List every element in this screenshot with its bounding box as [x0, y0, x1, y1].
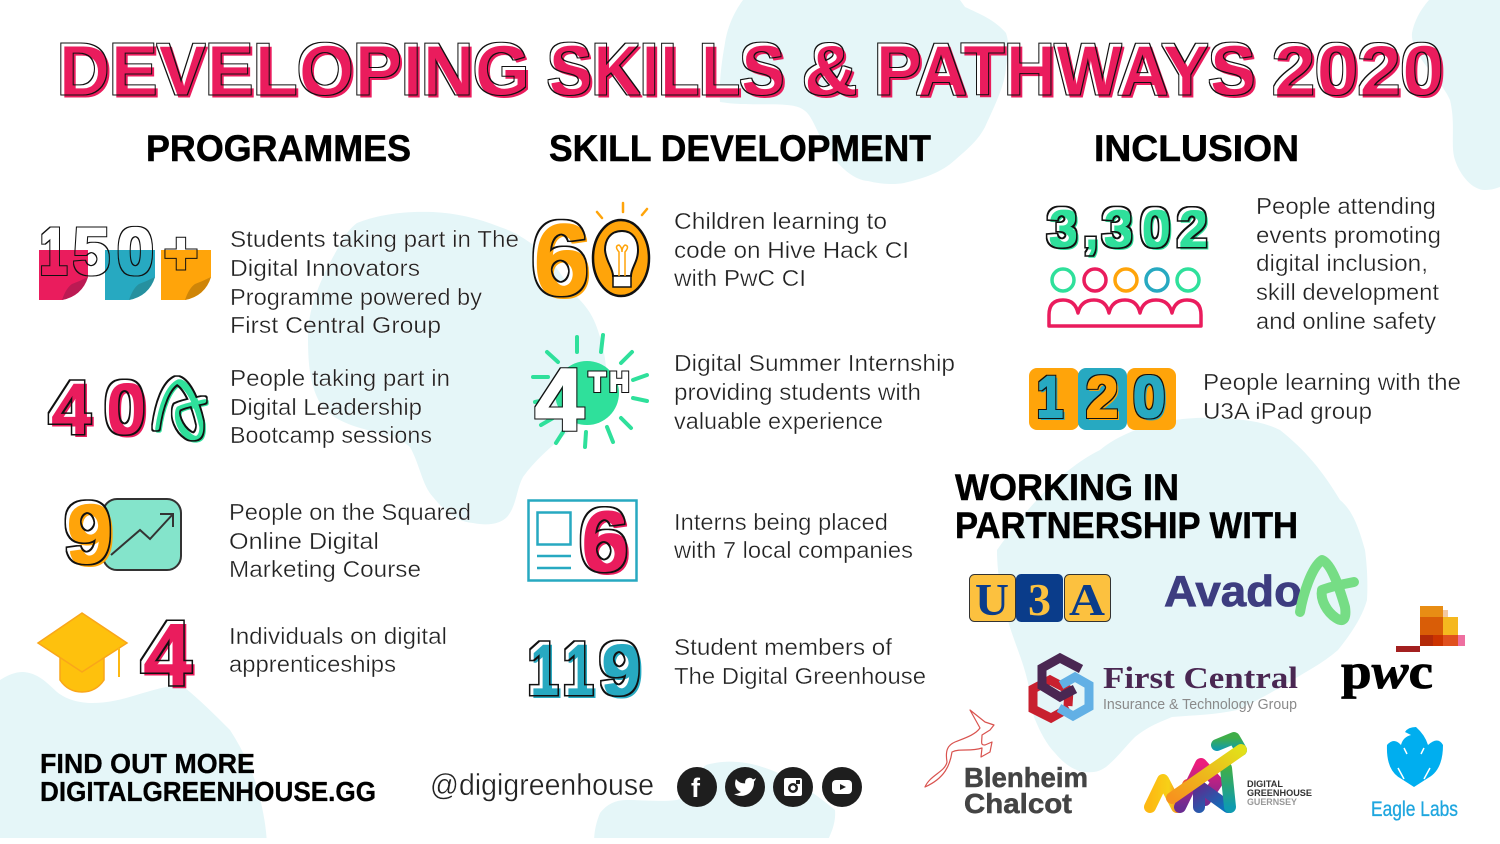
- stat text: 40 bootcamp: People taking part in: [230, 365, 450, 391]
- icon: 150+ on sticky notes: 0: [117, 214, 154, 288]
- panel: partner logos: [925, 560, 1465, 821]
- icon: 4th with sun: TH: [589, 367, 633, 397]
- stat text: 150+ students: Programme powered by: [230, 284, 483, 310]
- logo: First Central: First Central: [1103, 660, 1298, 695]
- call to action: find out more: [40, 748, 376, 807]
- stat text: 40 bootcamp: Digital Leadership: [230, 394, 422, 420]
- icon: 150+ on sticky notes: 1: [40, 214, 67, 288]
- stat text: 4 apprenticeships: apprenticeships: [229, 651, 396, 677]
- social handle: @digigreenhouse: [430, 767, 654, 802]
- stat text: 3,302 people: and online safety: [1256, 308, 1437, 334]
- icon: 119: 1: [528, 627, 558, 710]
- stat text: 150+ students: [230, 226, 519, 338]
- stat text: 150+ students: First Central Group: [230, 312, 441, 338]
- stat text: 6 interns: [673, 509, 913, 563]
- stat text: 6 interns: with 7 local companies: [673, 537, 913, 563]
- stat text: 60 children: code on Hive Hack CI: [674, 237, 909, 263]
- icon: 40 with Avado mark: [49, 366, 203, 449]
- logo: Eagle Labs: Eagle Labs: [1371, 798, 1458, 821]
- logo: First Central: Insurance & Technology Group: [1103, 696, 1297, 713]
- stat text: 119 members: Student members of: [674, 634, 893, 660]
- heading: programmes: PROGRAMMES: [146, 128, 411, 169]
- panel: skill development: [528, 201, 955, 710]
- stat text: 60 children: Children learning to: [674, 208, 887, 234]
- stat text: 9 squared: Marketing Course: [229, 556, 421, 582]
- logo: Digital Greenhouse: DIGITAL: [1247, 779, 1283, 790]
- stat text: 3,302 people: events promoting: [1256, 222, 1441, 248]
- panel: programmes: [38, 214, 519, 704]
- stat text: 119 members: [674, 634, 926, 689]
- stat text: 4th internship: Digital Summer Internship: [674, 350, 955, 376]
- icon: 4th with sun: 4: [535, 350, 584, 449]
- number: 3,302: 3,302: [1047, 198, 1207, 258]
- call to action: find out more: DIGITALGREENHOUSE.GG: [40, 776, 376, 807]
- title: &: [802, 30, 857, 110]
- stat text: 9 squared: Online Digital: [229, 528, 379, 554]
- logo: PwC: [1341, 606, 1465, 699]
- social icons: [677, 767, 862, 807]
- heading: working in partnership: WORKING IN: [955, 467, 1179, 508]
- icon: 120 tiles: 1: [1037, 365, 1063, 430]
- stat text: 40 bootcamp: [230, 365, 450, 448]
- title: SKILLS: [547, 30, 784, 110]
- stat text: 150+ students: Students taking part in The: [230, 226, 519, 252]
- stat text: 120 people: People learning with the: [1203, 369, 1461, 395]
- heading: skill development: SKILL DEVELOPMENT: [549, 128, 931, 169]
- icon: 4th with sun: [533, 335, 647, 449]
- stat text: 3,302 people: skill development: [1256, 279, 1440, 305]
- logo: Blenheim Chalcot: Chalcot: [964, 788, 1072, 819]
- icon: 150+ on sticky notes: +: [164, 221, 198, 286]
- icon: 60 with lightbulb: [531, 201, 649, 317]
- logo: Blenheim Chalcot: Blenheim: [964, 762, 1088, 793]
- logo: U3A: U: [975, 574, 1009, 625]
- logo: Avado: [1164, 560, 1354, 620]
- call to action: find out more: FIND OUT MORE: [40, 748, 255, 779]
- logo: First Central: [1033, 658, 1298, 718]
- icon: 6 on id card: [528, 490, 636, 589]
- logo: Avado: Avado: [1164, 567, 1302, 616]
- heading: working in partnership: [955, 467, 1298, 546]
- logo: Digital Greenhouse: GUERNSEY: [1247, 797, 1298, 808]
- icon: 119: 9: [599, 627, 640, 710]
- stat text: 3,302 people: digital inclusion,: [1256, 250, 1428, 276]
- title: PATHWAYS: [874, 30, 1255, 110]
- logo: U3A: A: [1069, 574, 1105, 625]
- icon: audience: [1049, 269, 1201, 326]
- stat text: 3,302 people: People attending: [1256, 193, 1436, 219]
- stat text: 60 children: with PwC CI: [673, 265, 806, 291]
- panel: inclusion: [1029, 193, 1461, 430]
- logo: U3A: [970, 574, 1110, 625]
- title: 2020: [1272, 30, 1443, 110]
- icon: 150+ on sticky notes: 5: [73, 214, 110, 288]
- stat text: 4 apprenticeships: [229, 623, 447, 677]
- heading: working in partnership: PARTNERSHIP WITH: [955, 505, 1298, 546]
- stat text: 6 interns: Interns being placed: [674, 509, 888, 535]
- stat text: 40 bootcamp: Bootcamp sessions: [230, 422, 432, 448]
- icon: 150+ on sticky notes: [39, 214, 211, 300]
- stat text: 9 squared: [229, 499, 471, 582]
- stat text: 4th internship: [674, 350, 955, 434]
- logo: Eagle Labs: [1371, 727, 1458, 821]
- icon: 120 tiles: [1029, 365, 1176, 430]
- icon: 60 with lightbulb: 6: [531, 201, 589, 317]
- social icons: f: [691, 773, 701, 803]
- icon: graduation cap: [38, 613, 127, 692]
- heading: inclusion: INCLUSION: [1094, 128, 1299, 169]
- logo: Digital Greenhouse: GREENHOUSE: [1247, 788, 1312, 799]
- stat text: 119 members: The Digital Greenhouse: [674, 663, 926, 689]
- icon: 9 with growth chart: 9: [64, 485, 112, 581]
- logo: U3A: 3: [1028, 574, 1051, 625]
- stat text: 3,302 people: [1256, 193, 1441, 334]
- stat text: 4th internship: providing students with: [674, 379, 921, 405]
- title: DEVELOPING: [57, 30, 529, 110]
- stat text: 4 apprenticeships: Individuals on digital: [229, 623, 447, 649]
- logo: PwC: pwc: [1341, 643, 1433, 699]
- icon: 119: [528, 627, 640, 710]
- logo: Blenheim Chalcot: [925, 710, 1088, 819]
- logo: Digital Greenhouse: [1150, 738, 1312, 808]
- title: [57, 30, 1443, 110]
- stat text: 60 children: [673, 208, 909, 291]
- stat text: 120 people: [1203, 369, 1461, 424]
- stat text: 120 people: U3A iPad group: [1203, 398, 1372, 424]
- stat text: 4th internship: valuable experience: [674, 408, 883, 434]
- icon: 40 with Avado mark: 40: [49, 366, 145, 449]
- icon: 6 on id card: 6: [579, 490, 628, 589]
- stat text: 9 squared: People on the Squared: [229, 499, 471, 525]
- icon: 119: 1: [563, 627, 593, 710]
- number: 4: 4: [141, 604, 191, 704]
- stat text: 150+ students: Digital Innovators: [230, 255, 420, 281]
- icon: 120 tiles: 2: [1086, 365, 1118, 430]
- icon: 120 tiles: 0: [1133, 365, 1165, 430]
- icon: 9 with growth chart: [64, 485, 181, 581]
